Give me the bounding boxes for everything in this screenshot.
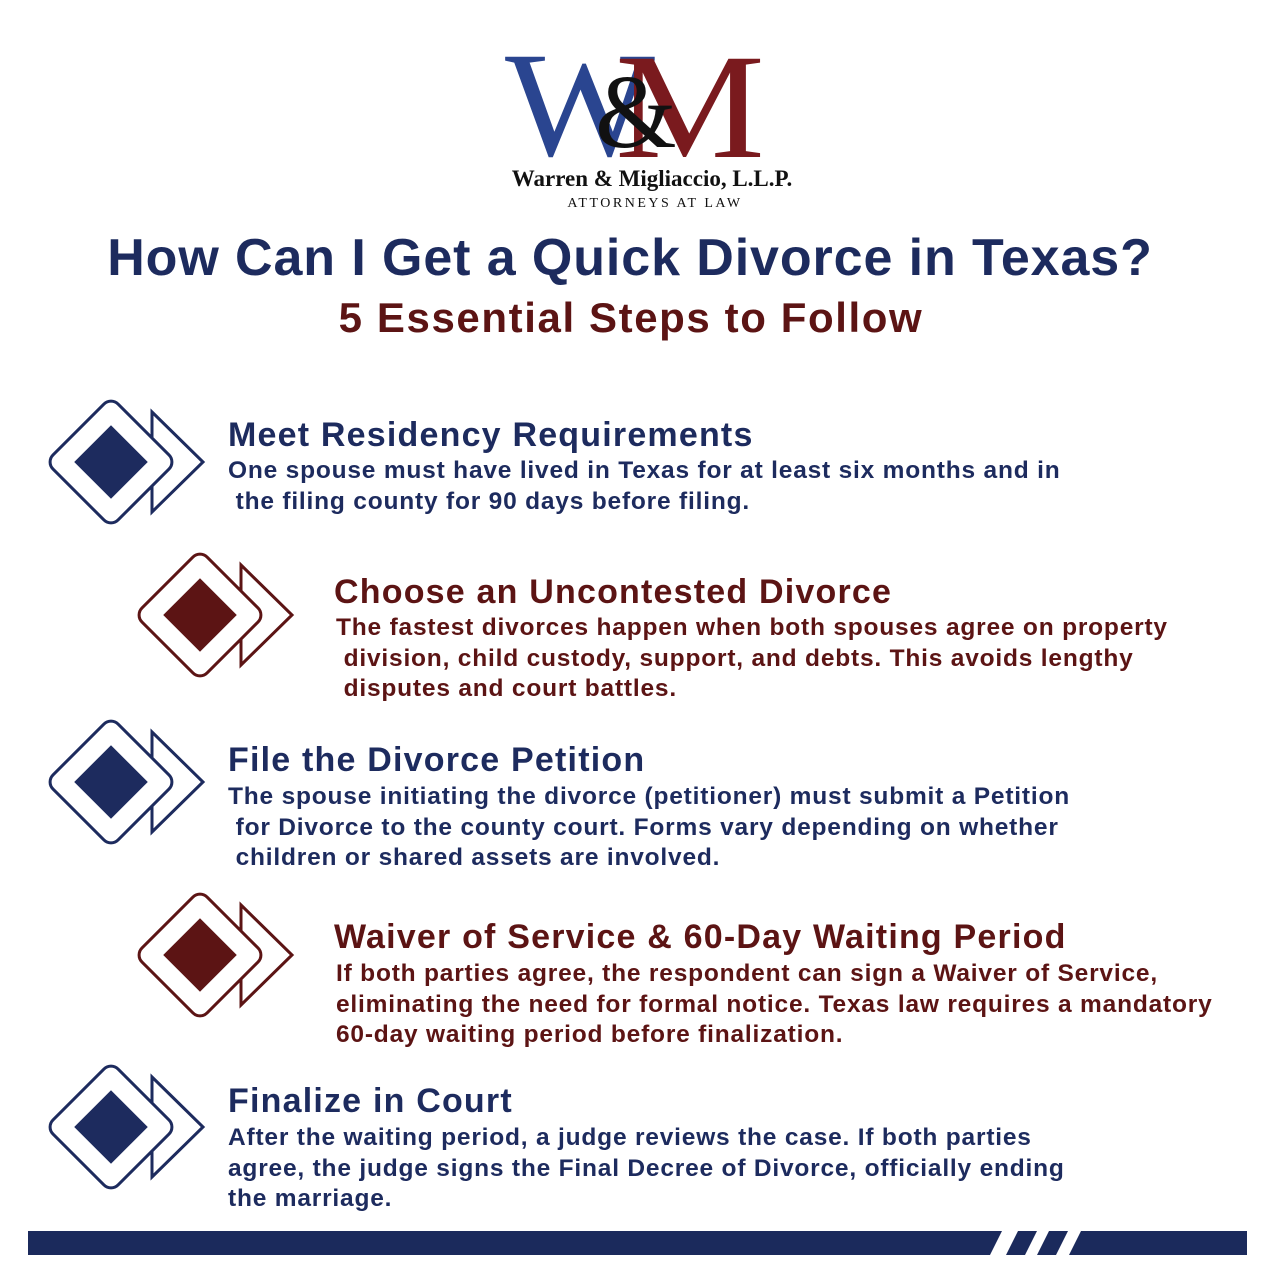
text: 60-day waiting period before finalization. (336, 1021, 843, 1048)
heading: File the Divorce Petition (228, 741, 645, 779)
text (336, 960, 1213, 1048)
icon: navy diamond (48, 1064, 206, 1190)
logo monogram (505, 22, 765, 190)
text (336, 614, 1168, 702)
text (228, 457, 1060, 514)
heading: Meet Residency Requirements (228, 416, 754, 454)
text: disputes and court battles. (344, 675, 677, 702)
text (228, 1124, 1065, 1212)
icon: maroon diamond (138, 892, 294, 1018)
text: agree, the judge signs the Final Decree of Divorce, officially ending (228, 1154, 1065, 1182)
text: division, child custody, support, and debts. This avoids lengthy (344, 644, 1134, 672)
footer bar (28, 1231, 1247, 1255)
title: How Can I Get a Quick Divorce in Texas? (107, 229, 1153, 287)
step 4 (138, 892, 1213, 1048)
text: The spouse initiating the divorce (petitioner) must submit a Petition (228, 783, 1070, 810)
text (228, 783, 1070, 871)
text: the marriage. (228, 1185, 392, 1212)
subtitle: 5 Essential Steps to Follow (339, 294, 923, 341)
heading: Choose an Uncontested Divorce (334, 573, 892, 611)
text: If both parties agree, the respondent can sign a Waiver of Service, (336, 960, 1158, 987)
text: One spouse must have lived in Texas for at least six months and in (228, 457, 1060, 484)
heading: Waiver of Service & 60-Day Waiting Period (334, 918, 1067, 956)
logo (505, 35, 792, 211)
step 5 (48, 1064, 1065, 1212)
logo tagline: ATTORNEYS AT LAW (567, 196, 743, 211)
text: for Divorce to the county court. Forms vary depending on whether (236, 814, 1059, 840)
step 1 (48, 400, 1060, 524)
step 3 (48, 720, 1070, 871)
icon: maroon diamond (138, 552, 294, 678)
text: children or shared assets are involved. (236, 844, 720, 871)
step 2 (138, 552, 1168, 702)
heading: Finalize in Court (228, 1082, 513, 1120)
text: eliminating the need for formal notice. Texas law requires a mandatory (336, 990, 1213, 1018)
text: the filing county for 90 days before filing. (236, 488, 750, 514)
icon: navy diamond (48, 720, 205, 844)
text: The fastest divorces happen when both spouses agree on property (336, 614, 1168, 641)
logo firm name: Warren & Migliaccio, L.L.P. (512, 166, 792, 191)
logo monogram: & (595, 53, 677, 170)
text: After the waiting period, a judge reviews the case. If both parties (228, 1124, 1032, 1151)
icon: navy diamond (48, 400, 206, 524)
